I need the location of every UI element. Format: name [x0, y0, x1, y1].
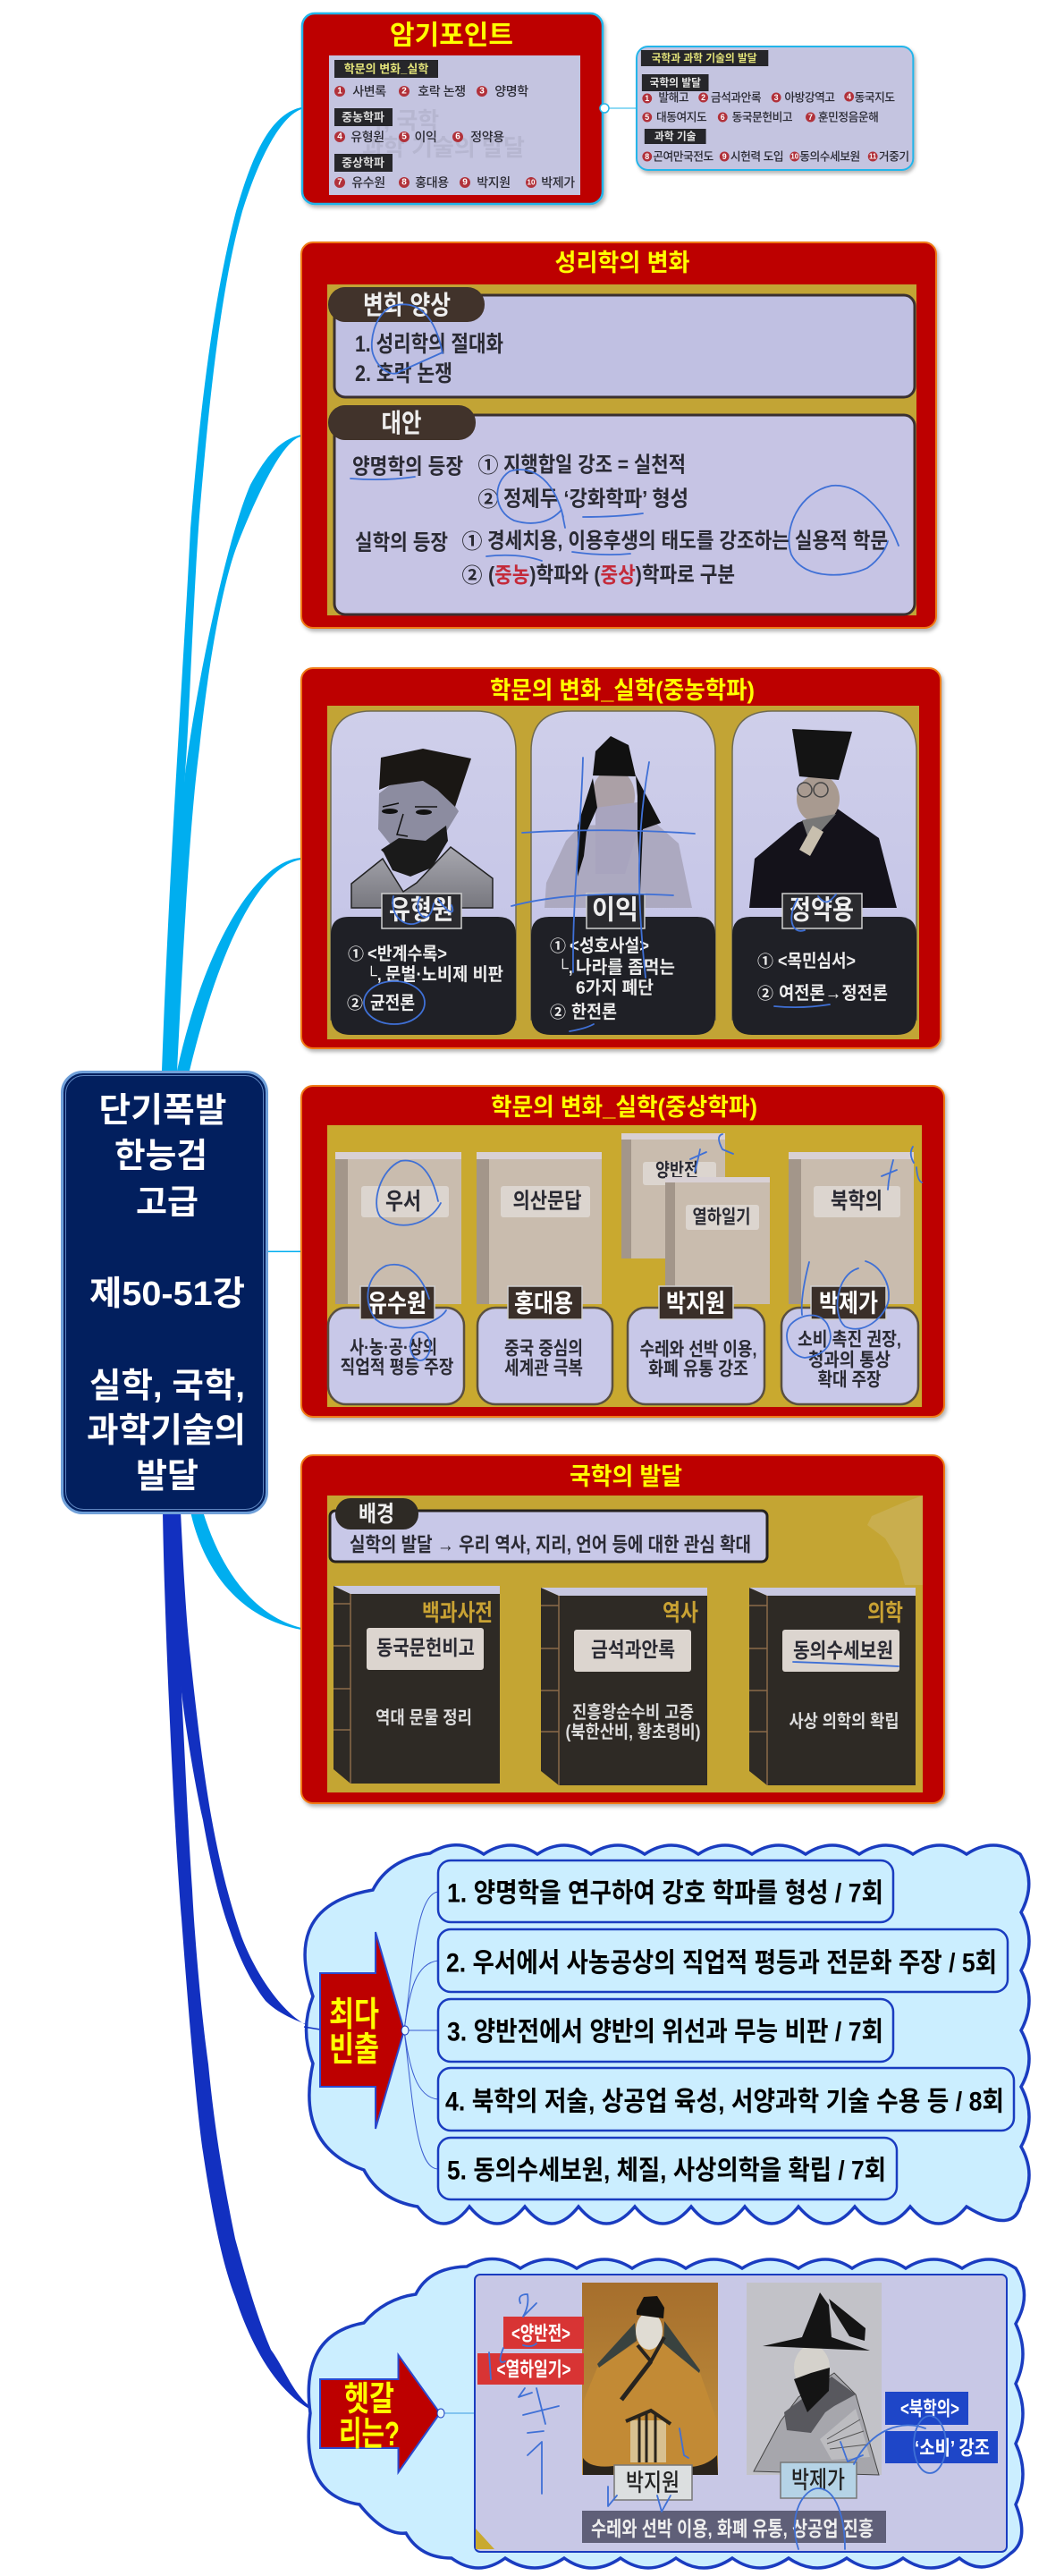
description card: Yu Su-won: 사·농·공·상의 [350, 1338, 437, 1358]
label: Yeolha ilgi: <열하일기> [497, 2358, 570, 2381]
item 4 [438, 2068, 1014, 2131]
description card: Hong Dae-yong: 홍대용 [514, 1290, 573, 1317]
book: Useo [335, 1152, 461, 1304]
item 3: 3. 양반전에서 양반의 위선과 무능 비판 / 7회 [447, 2018, 883, 2046]
connector: central node to jungsang panel [268, 1250, 301, 1252]
panel: national studies and science list: 거중기 [879, 149, 909, 164]
panel: silhak jungsang school [301, 1086, 944, 1417]
list slide: 박제가 [541, 175, 575, 190]
box: aspects of change [328, 287, 915, 397]
panel: national studies and science list: 1 [645, 94, 649, 103]
box: aspects of change: 1. 성리학의 절대화 [355, 332, 503, 357]
description card: Park Je-ga: 박제가 [819, 1290, 878, 1317]
name: Park Je-ga [781, 2462, 857, 2498]
central node: 고급 [136, 1184, 198, 1222]
portrait: Yi Ik [545, 736, 692, 908]
book: medicine: 동의수세보원 [793, 1639, 893, 1662]
panel: national studies and science list: 발해고 [658, 90, 689, 105]
central node: 과학기술의 [87, 1412, 246, 1450]
description card: Yu Su-won: 유수원 [367, 1290, 426, 1317]
pen marks [350, 470, 899, 575]
panel: national studies and science list: 2 [701, 93, 705, 102]
connector: central node to memorize-points panel [162, 107, 301, 1071]
card: Yi Ik: 6가지 폐단 [576, 978, 654, 998]
panel: change of neo-Confucianism [301, 242, 936, 628]
name: Park Je-ga: 박제가 [791, 2467, 845, 2494]
panel: memorize points [302, 13, 603, 204]
portrait: Park Ji-won [582, 2283, 718, 2475]
panel: national studies and science list: 동국지도 [855, 90, 895, 105]
card: Yu Hyeong-won: 균전론 [370, 993, 415, 1013]
central node: 단기폭발 [98, 1092, 226, 1130]
slide background [327, 1496, 923, 1792]
description card: Hong Dae-yong: 중국 중심의 [504, 1338, 583, 1360]
description card: Park Je-ga: 소비 촉진 권장, [798, 1329, 901, 1351]
central node [63, 1072, 266, 1513]
title: jungnong school: 학문의 변화_실학(중농학파) [490, 677, 755, 704]
book: Yeolha ilgi: 열하일기 [692, 1208, 751, 1227]
card: Yu Hyeong-won: <반계수록> [367, 944, 447, 964]
panel: development of national studies [301, 1455, 944, 1803]
box: background [330, 1498, 767, 1562]
portrait: Jeong Yak-yong [749, 729, 897, 908]
label: consumption emphasis: ‘소비’ 강조 [915, 2436, 990, 2460]
card: Yu Hyeong-won: ② [347, 995, 363, 1013]
box: alternatives: ① [461, 530, 483, 553]
book: Uisan mundap [477, 1152, 602, 1304]
book: history: 역사 [663, 1599, 698, 1626]
slide: Park Ji-won and Park Je-ga [475, 2275, 1007, 2552]
card: Jeong Yak-yong: 정약용 [789, 896, 854, 925]
slide background [327, 706, 919, 1039]
card: Yi Ik: 한전론 [571, 1002, 617, 1022]
cloud: confusing items [308, 2258, 1024, 2568]
title: national studies: 국학의 발달 [570, 1463, 682, 1490]
central node: 제50-51강 [89, 1275, 245, 1313]
box: alternatives: 정제두 ‘강화학파’ 형성 [503, 487, 688, 512]
list slide: 2 [401, 86, 407, 97]
card: Yu Hyeong-won: 유형원 [389, 896, 453, 925]
box: background: 실학의 발달 → 우리 역사, 지리, 언어 등에 대한 관심 확대 [350, 1533, 751, 1556]
book: history: 금석과안록 [591, 1638, 675, 1661]
item 3 [438, 1999, 893, 2062]
panel: national studies and science list: 아방강역고 [784, 90, 835, 105]
book: medicine: 사상 의학의 확립 [789, 1711, 899, 1732]
panel: national studies and science list: 국학의 발달 [650, 76, 701, 89]
card: Yu Hyeong-won: └, [366, 965, 382, 984]
box: alternatives: 양명학의 등장 [352, 454, 463, 479]
panel: national studies and science list: 10 [790, 152, 799, 161]
panel: national studies and science list: 4 [847, 92, 851, 101]
item 5: 5. 동의수세보원, 체질, 사상의학을 확립 / 7회 [447, 2156, 886, 2186]
name: Park Ji-won: 박지원 [626, 2470, 680, 2496]
box: alternatives: 대안 [381, 409, 422, 438]
book: Yangbanjeon: 양반전 [655, 1161, 698, 1181]
list slide: 3 [479, 86, 485, 97]
central node: 한능검 [114, 1138, 207, 1175]
card: Jeong Yak-yong: 여전론→정전론 [779, 983, 888, 1004]
list slide: 4 [337, 132, 342, 141]
card: Jeong Yak-yong: <목민심서> [778, 951, 856, 971]
list slide: 1 [337, 86, 342, 97]
portrait: Park Je-ga [747, 2283, 882, 2475]
list slide: 과학 기술의 발달 [362, 134, 525, 161]
card: Yu Hyeong-won [331, 711, 516, 1035]
description card: Park Je-ga: 청과의 통상 [808, 1351, 891, 1370]
item 1: 1. 양명학을 연구하여 강호 학파를 형성 / 7회 [447, 1878, 883, 1909]
box: alternatives: ② [461, 564, 483, 587]
book: history: (북한산비, 황초령비) [565, 1722, 701, 1742]
box: aspects of change: 변화 양상 [363, 291, 451, 320]
card: Jeong Yak-yong [732, 711, 916, 1035]
card: Yu Hyeong-won: 문벌·노비제 비판 [385, 964, 503, 985]
arrow: most frequent: 빈출 [329, 2031, 379, 2069]
bar: promotion summary: 수레와 선박 이용, 화폐 유통, 상공업 진흥 [591, 2517, 874, 2540]
panel: national studies and science list: 8 [645, 152, 649, 161]
name: Park Ji-won [614, 2465, 692, 2500]
list slide: 정약용 [470, 130, 504, 144]
card: Yi Ik: <성호사설> [570, 936, 649, 956]
box: alternatives [328, 405, 915, 614]
box: alternatives: 경세치용, 이용후생의 태도를 강조하는 실용적 학문 [487, 530, 888, 553]
connector: central node to most-frequent arrow [170, 1512, 320, 2030]
connector dot and line to side panel [600, 104, 637, 113]
connector: central node to jungnong panel [177, 858, 301, 1071]
list slide: 중농학파 [342, 111, 384, 123]
list slide: 양명학 [494, 84, 528, 98]
box: alternatives: 지행합일 강조 = 실천적 [503, 453, 686, 478]
title: memorize points: 암기포인트 [390, 21, 513, 50]
list slide: 호락 논쟁 [418, 84, 466, 98]
list slide: 유수원 [351, 175, 385, 190]
description card: Park Ji-won: 박지원 [666, 1290, 725, 1317]
list slide: 8 [401, 177, 407, 188]
list slide: 10 [528, 179, 536, 186]
arrow: confusing [320, 2355, 475, 2472]
card: Jeong Yak-yong: ① [757, 953, 773, 970]
central node: 발달 [136, 1458, 198, 1496]
panel: national studies and science list: 5 [645, 113, 649, 122]
panel: national studies and science list: 금석과안록 [711, 90, 762, 105]
slide background [327, 284, 916, 615]
list slide: 사변록 [352, 84, 386, 98]
box: alternatives: ② [477, 487, 499, 511]
list slide: 이익 [415, 130, 436, 144]
card: Yi Ik [511, 711, 715, 1035]
item 1 [438, 1860, 893, 1922]
arrow: most frequent [320, 1932, 409, 2129]
list slide: 중상학파 [342, 156, 384, 170]
label: Bukhakui [885, 2392, 968, 2425]
description card: Yu Su-won [328, 1265, 464, 1404]
book: encyclopedia: 백과사전 [422, 1599, 493, 1626]
box: alternatives: (중농)학파와 (중상)학파로 구분 [488, 564, 735, 587]
item 5 [438, 2138, 897, 2199]
card: Yi Ik: 이익 [592, 896, 638, 925]
description card: Park Ji-won [628, 1286, 764, 1404]
card: Jeong Yak-yong: ② [757, 985, 773, 1003]
book: Useo: 우서 [385, 1188, 421, 1215]
panel: national studies and science list: 시헌력 도입 [730, 149, 783, 164]
arrow: confusing: 리는? [339, 2416, 400, 2453]
panel: national studies and science list: 9 [722, 152, 727, 161]
panel: national studies and science list: 동국문헌비고 [732, 110, 793, 124]
book: Yeolha ilgi [665, 1177, 770, 1304]
list slide: 유형원 [350, 130, 384, 144]
panel: national studies and science list: 대동여지도 [656, 110, 707, 124]
box: alternatives: 실학의 등장 [355, 531, 448, 555]
card: Yi Ik: └, [557, 958, 573, 977]
book: encyclopedia [334, 1586, 500, 1784]
description card: Park Je-ga [781, 1261, 918, 1404]
book: Bukhakui: 북학의 [831, 1189, 882, 1214]
box: alternatives: ① [477, 453, 499, 477]
portrait: Yu Hyeong-won [351, 749, 493, 908]
book: medicine: 의학 [867, 1599, 903, 1626]
title: change of neo-Confucianism: 성리학의 변화 [554, 250, 690, 276]
box: background: 배경 [359, 1502, 394, 1527]
bar: promotion summary [582, 2511, 886, 2543]
pen marks [489, 2294, 946, 2549]
label: Yangbanjeon: <양반전> [511, 2322, 570, 2345]
list slide: 5 [401, 132, 407, 141]
box: aspects of change: 2. 호락 논쟁 [355, 361, 452, 386]
book: Uisan mundap: 의산문답 [513, 1190, 581, 1213]
description card: Park Ji-won: 수레와 선박 이용, [640, 1340, 756, 1360]
central node: 실학, 국학, [89, 1368, 245, 1405]
arrow: most frequent: 최다 [329, 1996, 379, 2034]
card: Yi Ik: ② [550, 1004, 566, 1021]
connector: central node to neo-Confucianism panel [170, 435, 301, 1071]
label: Yangbanjeon [503, 2317, 584, 2349]
panel: national studies and science list: 과학 기술 [654, 130, 697, 143]
title: jungsang school: 학문의 변화_실학(중상학파) [491, 1094, 757, 1121]
book: encyclopedia: 역대 문물 정리 [376, 1707, 472, 1728]
list slide: 학문의 변화_실학 [344, 63, 428, 75]
panel: national studies and science list: 곤여만국전도 [653, 149, 713, 164]
description card: Yu Su-won: 직업적 평등 주장 [340, 1358, 454, 1377]
panel: national studies and science list: 국학과 과학 기술의 발달 [652, 52, 757, 64]
book: history: 진흥왕순수비 고증 [572, 1702, 694, 1723]
card: Yi Ik: ① [550, 937, 566, 955]
connector: central node to confusing arrow [163, 1512, 320, 2414]
connector: central node to national studies panel [190, 1512, 301, 1630]
list slide: 학, 국학 [362, 107, 439, 134]
label: consumption emphasis [885, 2431, 998, 2463]
list slide: 9 [462, 177, 468, 188]
list slide: 박지원 [477, 175, 511, 190]
card: Yi Ik: 나라를 좀먹는 [576, 957, 675, 978]
panel: silhak jungnong school [301, 668, 941, 1048]
list slide: 7 [337, 177, 342, 188]
description card: Hong Dae-yong [477, 1286, 612, 1404]
slide background [327, 1125, 922, 1407]
book: history [541, 1588, 707, 1785]
stem into arrow [304, 2027, 320, 2029]
branch lines [404, 1892, 438, 2169]
label: Yeolha ilgi [477, 2353, 584, 2385]
book: Bukhakui [789, 1147, 922, 1304]
list slide: 홍대용 [415, 175, 449, 190]
list slide: 6 [455, 132, 460, 141]
panel: national studies and science list: 11 [869, 152, 877, 161]
book: medicine [749, 1588, 916, 1785]
card: Yu Hyeong-won: ① [348, 945, 364, 963]
item 2 [438, 1929, 1008, 1992]
panel: national studies and science list: 동의수세보원 [799, 149, 860, 164]
label: Bukhakui: <북학의> [900, 2397, 959, 2420]
book: encyclopedia: 동국문헌비고 [376, 1636, 475, 1659]
description card: Park Ji-won: 화폐 유통 강조 [648, 1360, 748, 1379]
book: Yangbanjeon [621, 1133, 733, 1258]
panel: national studies and science list [637, 47, 913, 170]
cloud: most frequent [304, 1845, 1029, 2224]
panel: national studies and science list: 7 [808, 113, 813, 122]
list slide [329, 55, 580, 195]
description card: Hong Dae-yong: 세계관 극복 [504, 1358, 583, 1379]
panel: national studies and science list: 6 [721, 113, 725, 122]
panel: national studies and science list: 훈민정음운해 [818, 110, 878, 124]
description card: Park Je-ga: 확대 주장 [817, 1370, 882, 1390]
panel: national studies and science list: 3 [774, 93, 779, 102]
arrow: confusing: 헷갈 [344, 2381, 394, 2419]
